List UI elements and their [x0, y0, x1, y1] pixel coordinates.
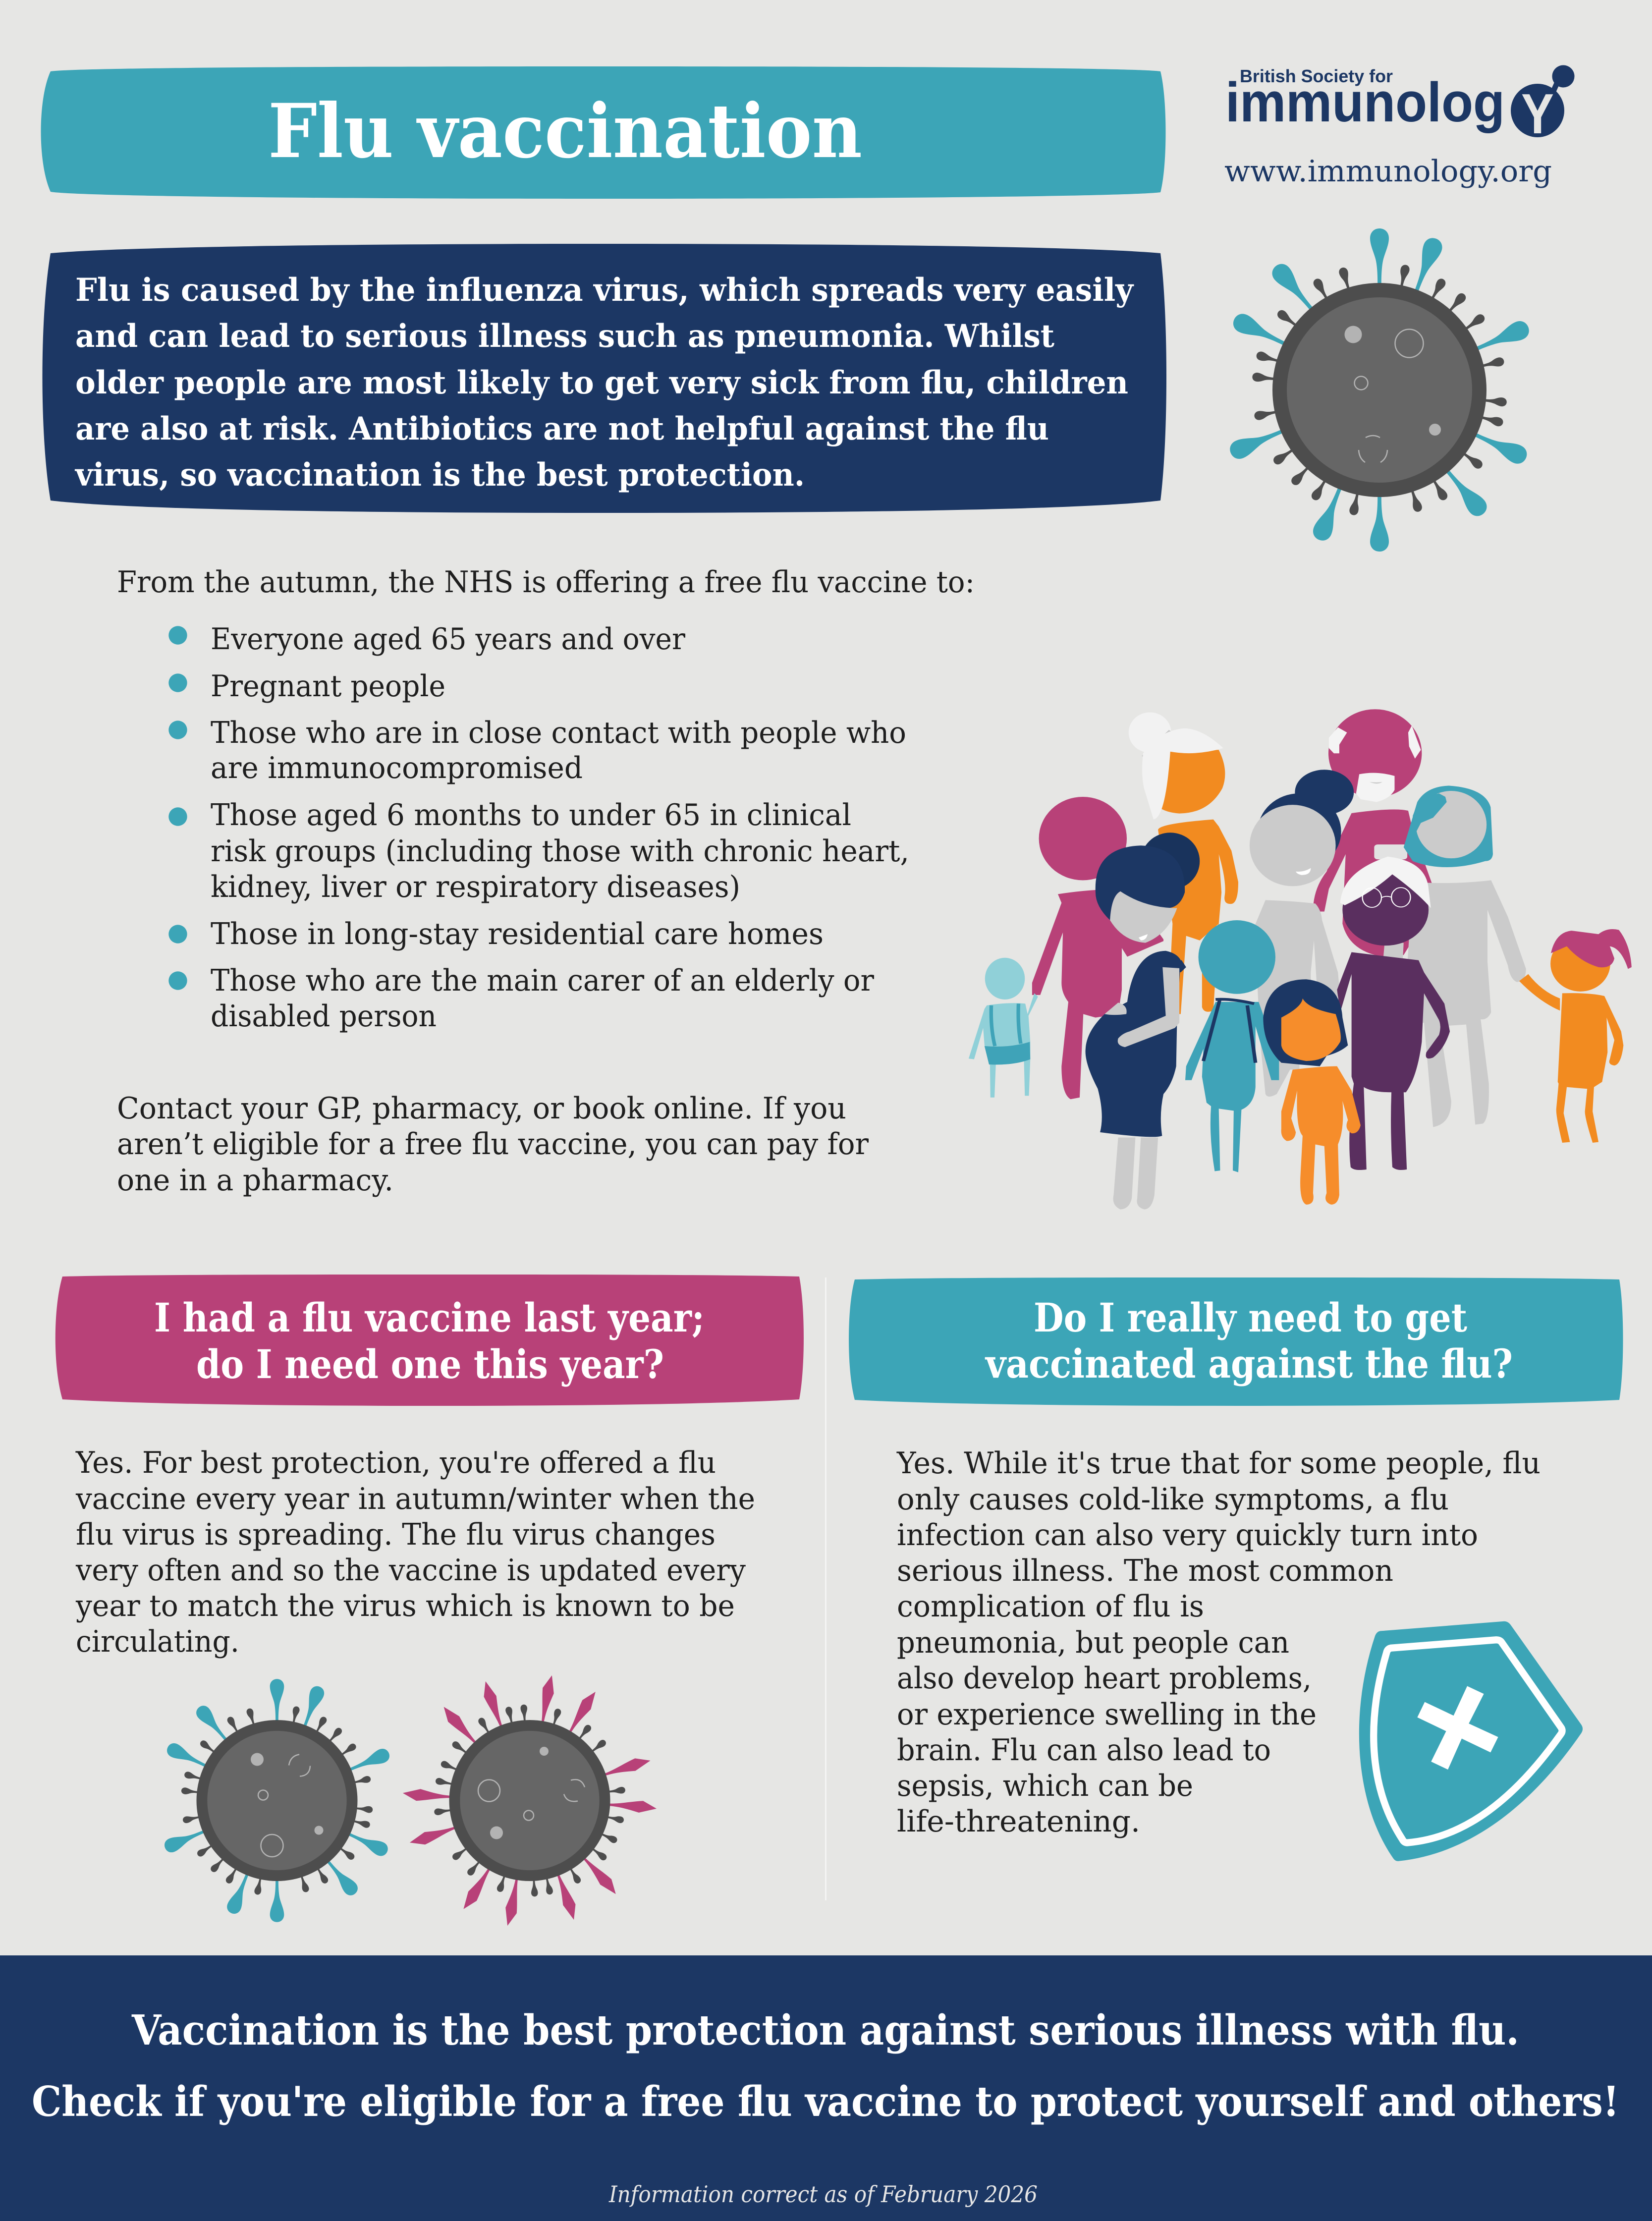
bullet list of eligible groups: are immunocompromised — [211, 751, 583, 785]
footer message: Vaccination is the best protection against serious illness with flu. — [131, 2006, 1519, 2054]
footer message — [32, 2006, 1619, 2126]
intro text: and can lead to serious illness such as pneumonia. Whilst — [75, 318, 1054, 355]
bullet list of eligible groups: risk groups (including those with chronic heart, — [211, 834, 909, 869]
title: Flu vaccination — [268, 88, 862, 175]
heading panel: really need — [849, 1277, 1623, 1406]
person: older person in purple with glasses — [1337, 857, 1450, 1170]
bullet list of eligible groups — [168, 622, 909, 1034]
right column answer text: or experience swelling in the — [897, 1697, 1317, 1732]
intro text — [74, 272, 1134, 494]
right column answer text: complication of flu is — [897, 1589, 1204, 1624]
person: pregnant woman in navy — [1086, 833, 1200, 1210]
person: woman in pink — [1032, 797, 1163, 1099]
divider — [825, 1277, 826, 1900]
bullet list of eligible groups: kidney, liver or respiratory diseases) — [211, 870, 740, 904]
person: girl in orange with navy hair — [1263, 979, 1361, 1205]
right column answer text: sepsis, which can be — [897, 1769, 1193, 1803]
icon: large flu virus — [1227, 228, 1532, 552]
logo: British Society for Immunology: British Society for — [1240, 66, 1393, 86]
text: NHS offer intro: From the autumn, the NHS is offering a free flu vaccine to: — [117, 565, 975, 600]
bullet list of eligible groups: Those aged 6 months to under 65 in clinical — [211, 798, 851, 833]
right column answer text — [896, 1446, 1541, 1839]
right column answer text: infection can also very quickly turn into — [897, 1518, 1478, 1553]
intro panel — [43, 244, 1166, 513]
heading text — [985, 1294, 1513, 1387]
left column answer text: flu virus is spreading. The flu virus changes — [76, 1517, 716, 1552]
person: woman in grey with navy bun — [1250, 770, 1354, 1097]
title banner — [41, 66, 1165, 199]
text: how to get the vaccine: Contact your GP, pharmacy, or book online. If you — [117, 1091, 846, 1126]
intro text: are also at risk. Antibiotics are not helpful against the flu — [75, 410, 1049, 447]
icon: shield with cross — [1359, 1621, 1583, 1861]
person: small child in orange with pink hair — [1519, 929, 1632, 1143]
heading text — [154, 1294, 705, 1388]
heading panel: last year — [55, 1275, 804, 1406]
right column answer text: Yes. While it's true that for some people, flu — [896, 1446, 1541, 1481]
left column answer text: Yes. For best protection, you're offered a flu — [75, 1445, 716, 1480]
intro text: virus, so vaccination is the best protection. — [74, 456, 805, 494]
bullet list of eligible groups: Those who are in close contact with people who — [211, 716, 906, 750]
person: toddler in light teal — [969, 958, 1038, 1098]
website url: www.immunology.org — [1224, 154, 1552, 189]
text: how to get the vaccine: one in a pharmacy. — [117, 1163, 393, 1198]
intro text: older people are most likely to get very sick from flu, children — [75, 364, 1128, 401]
text: how to get the vaccine — [117, 1091, 869, 1198]
intro text: Flu is caused by the influenza virus, which spreads very easily — [75, 272, 1134, 309]
left column answer text: circulating. — [76, 1624, 239, 1659]
logo: British Society for Immunology: immunolog — [1225, 71, 1505, 133]
bullet list of eligible groups: Everyone aged 65 years and over — [211, 622, 685, 657]
person: man in grey with teal hair — [1404, 786, 1526, 1127]
left column answer text — [75, 1445, 755, 1659]
footnote: Information correct as of February 2026 — [608, 2181, 1038, 2208]
right column answer text: also develop heart problems, — [897, 1661, 1312, 1696]
person: child in teal with backpack — [1185, 920, 1279, 1172]
right column answer text: pneumonia, but people can — [897, 1625, 1289, 1660]
heading text: I had a flu vaccine last year; — [154, 1294, 705, 1341]
person: older man in pink — [1313, 709, 1437, 957]
illustration: group of people — [969, 709, 1632, 1210]
bullet list of eligible groups: disabled person — [211, 999, 437, 1034]
right column answer text: serious illness. The most common — [897, 1554, 1393, 1588]
icon: teal virus — [163, 1679, 391, 1922]
text: how to get the vaccine: aren’t eligible for a free flu vaccine, you can pay for — [117, 1127, 869, 1162]
left column answer text: vaccine every year in autumn/winter when the — [75, 1482, 755, 1516]
heading text: vaccinated against the flu? — [985, 1340, 1513, 1387]
bullet list of eligible groups: Those who are the main carer of an elderly or — [211, 963, 874, 998]
left column answer text: year to match the virus which is known to be — [75, 1589, 735, 1623]
icon: pink mutated virus — [402, 1674, 657, 1927]
right column answer text: only causes cold-like symptoms, a flu — [897, 1482, 1449, 1517]
right column answer text: life-threatening. — [897, 1804, 1140, 1839]
logo: British Society for Immunology — [1225, 65, 1575, 146]
person: older woman in orange — [1129, 713, 1238, 1014]
bullet list of eligible groups: Those in long-stay residential care homes — [211, 917, 824, 951]
heading text: do I need one this year? — [196, 1341, 664, 1388]
bullet list of eligible groups: Pregnant people — [211, 669, 445, 704]
heading text: Do I really need to get — [1034, 1294, 1467, 1341]
left column answer text: very often and so the vaccine is updated every — [75, 1553, 746, 1588]
right column answer text: brain. Flu can also lead to — [897, 1733, 1271, 1768]
logo: British Society for Immunology: Y — [1521, 83, 1554, 146]
footer banner — [0, 1955, 1652, 2221]
